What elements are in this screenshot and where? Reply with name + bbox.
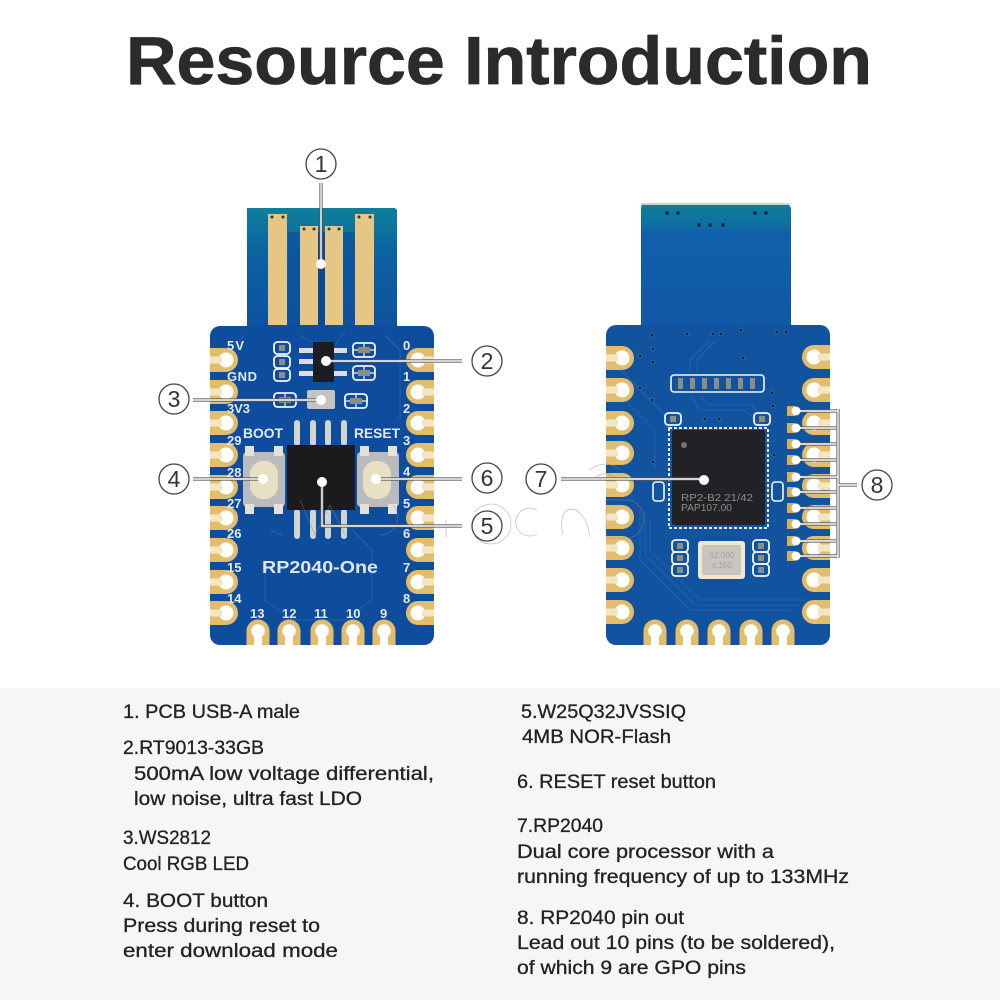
- silkscreen pin labels: 15: [227, 560, 241, 575]
- callout 3: 3: [168, 386, 180, 412]
- silkscreen pin labels: 11: [314, 606, 328, 621]
- RESET button: [357, 446, 399, 514]
- text block: item 2: 500mA low voltage differential,: [134, 764, 434, 785]
- back castellated pads bottom: [644, 620, 794, 645]
- WS2812 LED: [307, 390, 335, 409]
- text block: item 4: enter download mode: [123, 941, 338, 962]
- text block: item 2: [123, 738, 434, 810]
- callout 3: [159, 384, 326, 414]
- back PCB body: [606, 325, 830, 645]
- callout 2: 2: [481, 348, 493, 374]
- silkscreen pin labels: 6: [403, 526, 410, 541]
- silkscreen pin labels: 13: [250, 606, 264, 621]
- bottom text panel background: [0, 688, 1000, 1000]
- callout 6: 6: [481, 465, 493, 491]
- text block: item 2: low noise, ultra fast LDO: [134, 789, 362, 810]
- callout 7: 7: [535, 466, 547, 492]
- silkscreen pin labels: 26: [227, 526, 241, 541]
- text block: item 1: 1. PCB USB-A male: [123, 702, 300, 723]
- silkscreen pin labels: 7: [403, 560, 410, 575]
- callout 1: [306, 149, 336, 269]
- text block: item 3: 3.WS2812: [123, 828, 211, 849]
- silkscreen pin labels: 5V: [227, 338, 244, 353]
- castellated pads left: [210, 348, 238, 625]
- silkscreen pin labels: 8: [403, 591, 410, 606]
- silkscreen pin labels: 5: [403, 496, 410, 511]
- callout 6: [371, 463, 502, 493]
- flash chip legs and body: [287, 420, 355, 539]
- text block: item 4: Press during reset to: [123, 916, 320, 937]
- title: Resource Introduction: [126, 23, 872, 99]
- back traces: [620, 340, 805, 610]
- crystal: c.150: [712, 561, 732, 570]
- silkscreen pin labels: 3V3: [227, 401, 250, 416]
- text block: item 7: [517, 816, 849, 888]
- LDO RT9013: [299, 342, 347, 382]
- silkscreen pin labels: RESET: [354, 425, 400, 441]
- silkscreen pin labels: 29: [227, 433, 241, 448]
- text block: item 4: [123, 891, 338, 962]
- silkscreen pin labels: 12: [282, 606, 296, 621]
- callout 5: [317, 477, 502, 541]
- callout 4: 4: [168, 466, 181, 492]
- text block: item 5: 5.W25Q32JVSSIQ: [521, 702, 686, 723]
- text block: item 8: Lead out 10 pins (to be soldered),: [517, 933, 835, 954]
- PCB body: [210, 326, 434, 645]
- silkscreen pin labels: 28: [227, 465, 241, 480]
- text block: item 3: Cool RGB LED: [123, 854, 249, 875]
- board name: RP2040-One: [262, 557, 378, 577]
- text block: item 5: 4MB NOR-Flash: [522, 727, 671, 748]
- back small capacitors: [653, 413, 783, 576]
- callout 5: 5: [481, 513, 493, 539]
- silkscreen pin labels: GND: [227, 369, 257, 384]
- resistor row: [671, 375, 764, 392]
- text block: item 8: [517, 908, 835, 979]
- watermark: [300, 464, 644, 544]
- text block: item 8: of which 9 are GPO pins: [517, 958, 746, 979]
- callout 7: [526, 464, 709, 494]
- text block: item 7: Dual core processor with a: [517, 842, 774, 863]
- callout 2: [321, 346, 502, 376]
- castellated pads right: [406, 348, 434, 625]
- silkscreen pin labels: 9: [380, 606, 387, 621]
- text block: item 2: 2.RT9013-33GB: [123, 738, 264, 759]
- panel: board front: [210, 208, 434, 645]
- callout 1: 1: [315, 151, 327, 177]
- back castellated pads right: [802, 345, 830, 624]
- passive components: [274, 342, 375, 408]
- castellated pads bottom: [246, 620, 396, 645]
- panel: board back: [606, 203, 830, 645]
- silkscreen pin labels: BOOT: [243, 425, 283, 441]
- silkscreen pin labels: 3: [403, 433, 410, 448]
- callout 4: [159, 464, 268, 494]
- text block: item 6: 6. RESET reset button: [517, 772, 716, 793]
- text block: item 8: 8. RP2040 pin out: [517, 908, 685, 929]
- callout 8: 8: [871, 472, 883, 498]
- BOOT button: [243, 446, 285, 514]
- header solder pads: [787, 406, 795, 561]
- crystal: [698, 541, 745, 579]
- silkscreen pin labels: 14: [227, 591, 242, 606]
- RP2040 chip: [669, 428, 768, 528]
- crystal: 12.000: [710, 551, 735, 560]
- text block: item 3: [123, 828, 249, 875]
- silkscreen pin labels: 2: [403, 401, 410, 416]
- silkscreen pin labels: 27: [227, 496, 241, 511]
- back vias: [637, 327, 789, 465]
- text block: item 4: 4. BOOT button: [123, 891, 268, 912]
- RP2040 chip: PAP107.00: [681, 503, 732, 514]
- gold fingers: [268, 214, 374, 325]
- back castellated pads left: [606, 346, 634, 624]
- silkscreen pin labels: 4: [403, 464, 411, 479]
- silkscreen pin labels: 10: [346, 606, 360, 621]
- callout 8: [792, 406, 892, 560]
- text block: item 7: 7.RP2040: [517, 816, 603, 837]
- silkscreen pin labels: 1: [403, 369, 410, 384]
- PCB traces: [235, 330, 400, 620]
- back tab: [641, 203, 791, 326]
- text block: item 7: running frequency of up to 133MHz: [517, 867, 849, 888]
- silkscreen pin labels: [227, 338, 411, 621]
- USB-A tab: [247, 208, 397, 326]
- text block: item 5: [521, 702, 686, 748]
- silkscreen pin labels: 0: [403, 338, 410, 353]
- RP2040 chip: RP2-B2 21/42: [681, 493, 753, 504]
